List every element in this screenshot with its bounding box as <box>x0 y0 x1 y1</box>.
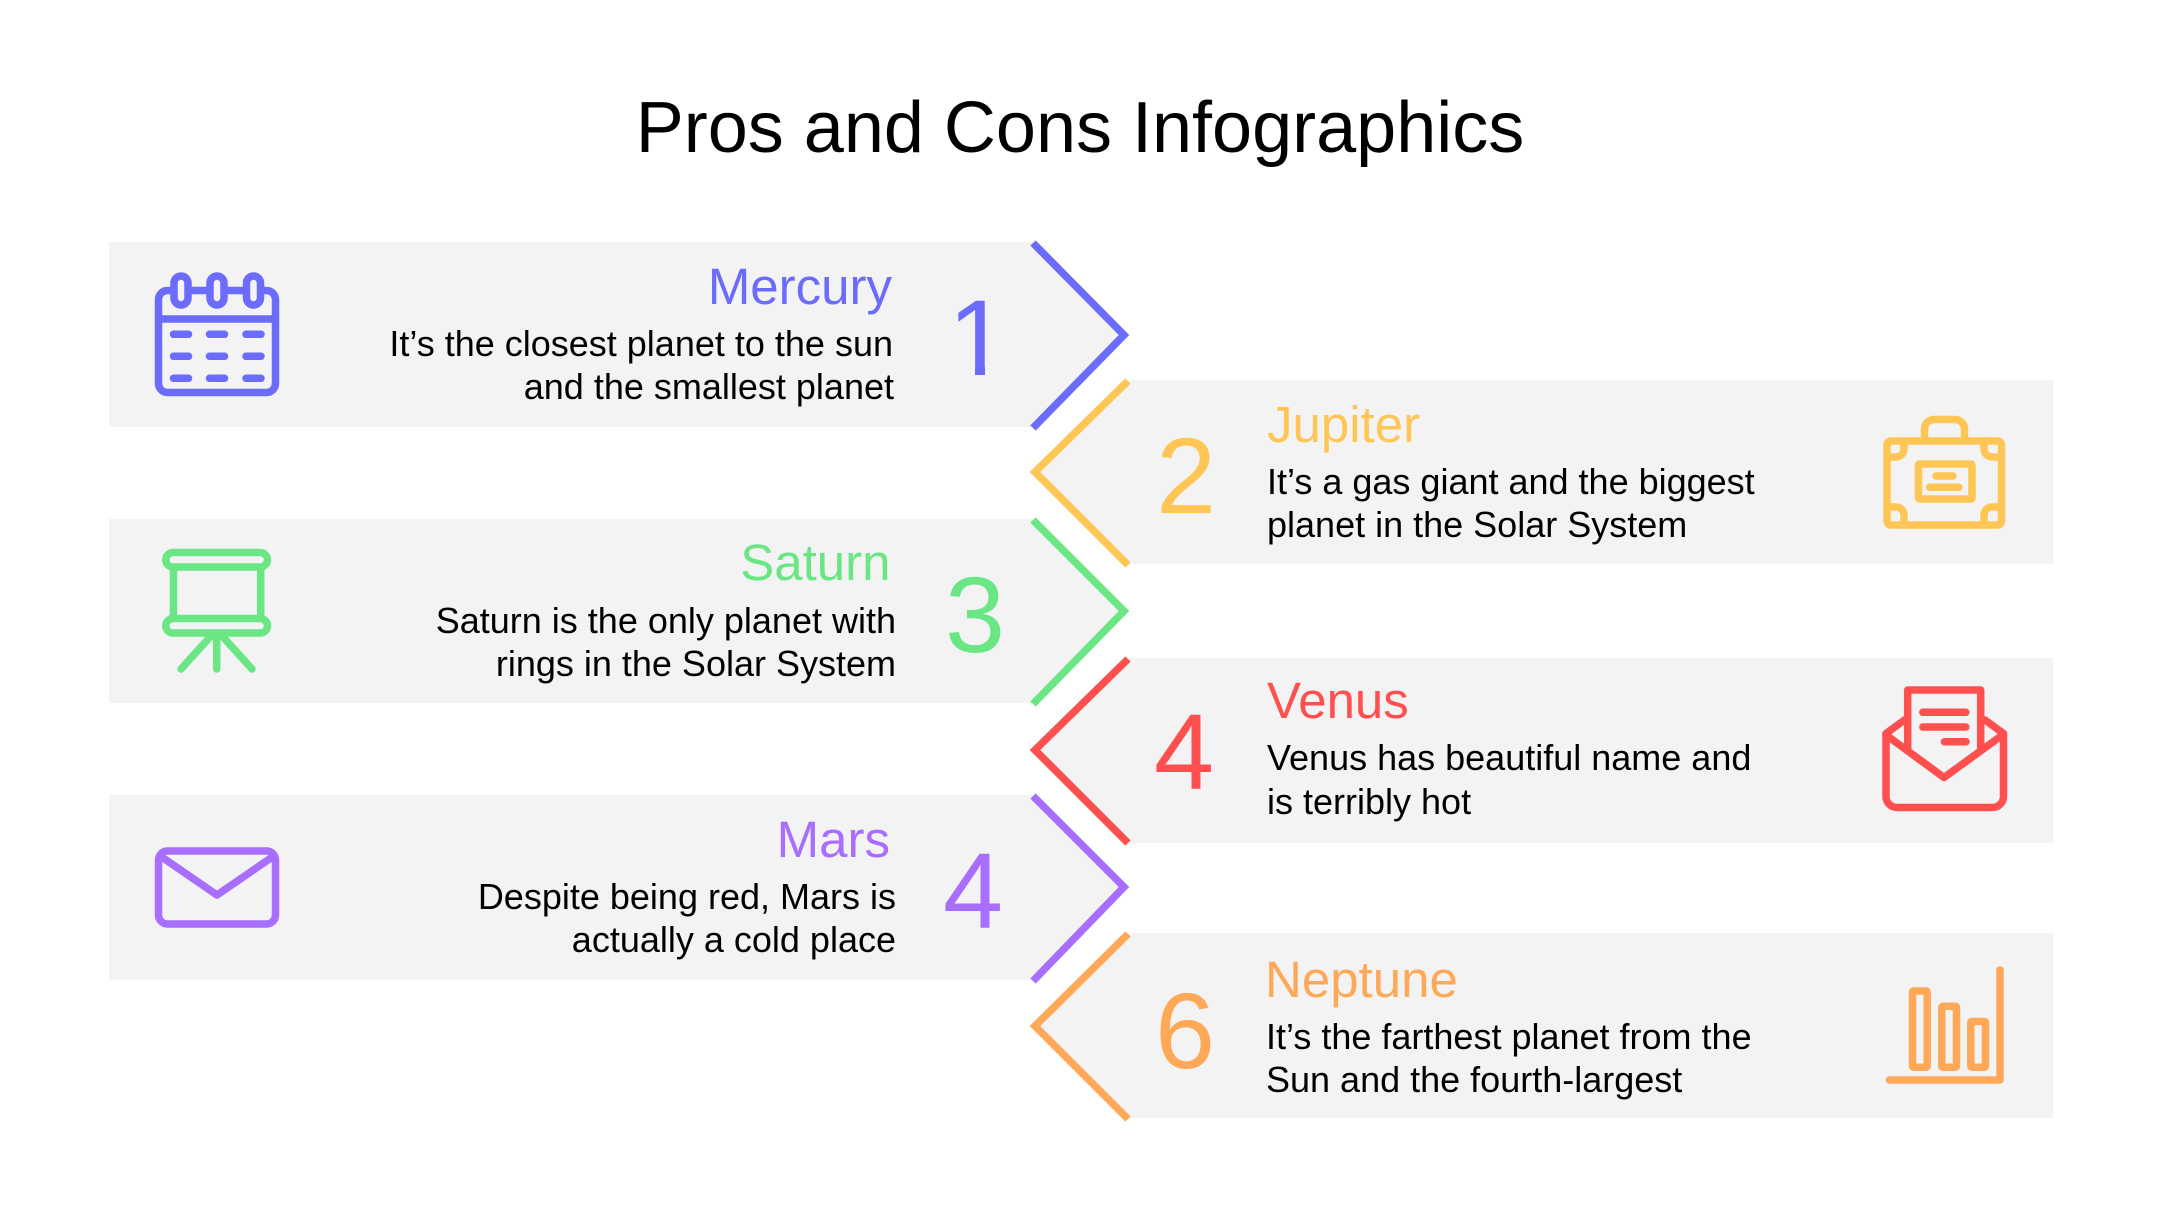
icon: open envelope <box>1886 690 2004 808</box>
chevron: Mars <box>1033 796 1124 981</box>
chevron: Venus <box>1035 659 1128 843</box>
heading: Mercury: Mercury <box>708 258 892 315</box>
panel: Mercury <box>109 242 1127 428</box>
panel: Mars <box>109 795 1127 981</box>
icon: presentation board <box>166 552 268 669</box>
title: Pros and Cons Infographics <box>636 88 1524 168</box>
number 4: 4 <box>943 830 1003 951</box>
text: Jupiter description: planet in the Solar System <box>1267 504 1687 545</box>
panel: Jupiter <box>1034 380 2053 565</box>
text: Mars description: actually a cold place <box>572 919 896 960</box>
icon: bar chart <box>1890 970 2000 1080</box>
text: Neptune description: Sun and the fourth-largest <box>1266 1059 1682 1100</box>
panel: Neptune <box>1034 933 2053 1119</box>
heading: Jupiter: Jupiter <box>1267 396 1420 453</box>
chevron: Saturn <box>1033 520 1124 704</box>
heading: Saturn: Saturn <box>740 534 890 591</box>
panel: Saturn <box>109 519 1127 704</box>
chevron: Jupiter <box>1035 381 1128 565</box>
heading: Neptune: Neptune <box>1265 951 1458 1008</box>
panel: Venus <box>1034 658 2053 843</box>
number 3: 3 <box>945 554 1005 675</box>
number 6: 6 <box>1155 970 1215 1091</box>
number 1: 1 <box>948 277 1008 398</box>
icon: briefcase <box>1887 420 2002 525</box>
text: Saturn description: rings in the Solar System <box>496 643 896 684</box>
number 4: 4 <box>1154 691 1214 812</box>
icon: calendar <box>158 276 276 392</box>
heading: Mars: Mars <box>777 811 890 868</box>
text: Neptune description: It’s the farthest planet from the <box>1266 1016 1752 1057</box>
text: Mars description: Despite being red, Mars is <box>478 876 896 917</box>
number 2: 2 <box>1156 415 1216 536</box>
heading: Venus: Venus <box>1267 672 1409 729</box>
icon: envelope <box>158 851 276 924</box>
chevron: Neptune <box>1035 934 1128 1119</box>
text: Jupiter description: It’s a gas giant and the biggest <box>1267 461 1755 502</box>
text: Venus description: Venus has beautiful name and <box>1267 737 1751 778</box>
chevron: Mercury <box>1033 243 1124 428</box>
text: Venus description: is terribly hot <box>1267 781 1471 822</box>
text: Mercury description: It’s the closest planet to the sun <box>389 323 893 364</box>
text: Saturn description: Saturn is the only planet with <box>436 600 896 641</box>
text: Mercury description: and the smallest planet <box>524 366 894 407</box>
